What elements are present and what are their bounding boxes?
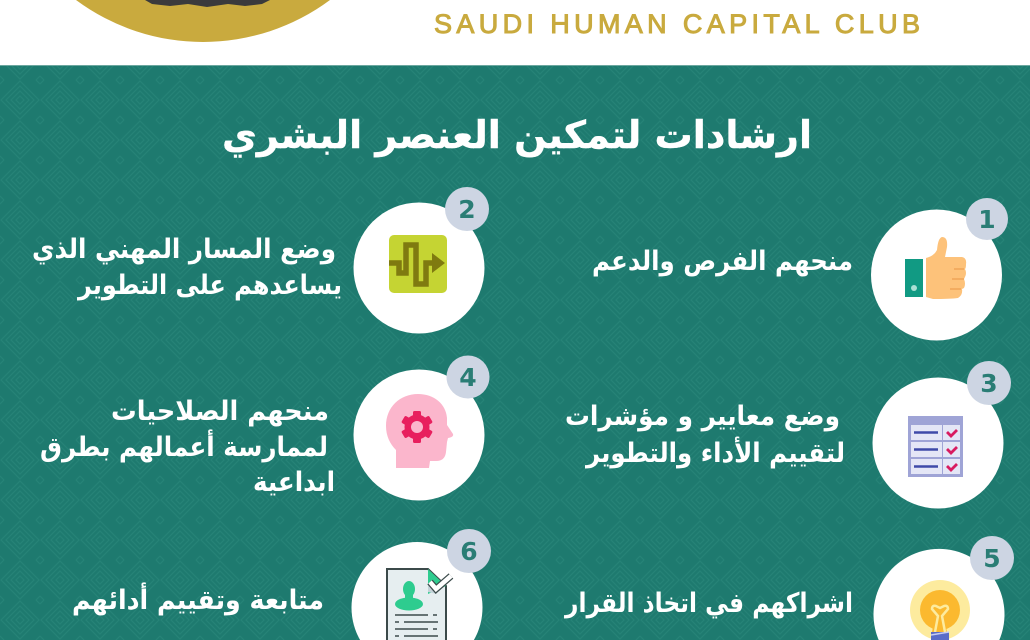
badge 2 <box>445 187 489 231</box>
item 2 text <box>32 234 342 301</box>
icon: path arrow <box>389 235 447 293</box>
item 4 text <box>40 396 335 498</box>
logo emblem <box>76 0 330 42</box>
icon: light bulb <box>910 580 970 640</box>
item 3 text: وضع معايير و مؤشرات <box>565 401 840 432</box>
badge 1 <box>966 198 1008 240</box>
item 2 circle <box>354 202 484 334</box>
item 5 circle <box>874 549 1004 640</box>
item 3 circle <box>872 378 1004 508</box>
item 4 text: لممارسة أعمالهم بطرق <box>40 429 328 463</box>
item 1 circle <box>871 210 1002 340</box>
item 4: authority to work creatively <box>40 356 490 500</box>
item 1: opportunities and support <box>592 198 1008 340</box>
item 3: standards and indicators <box>565 361 1011 508</box>
item 5 text: اشراكهم في اتخاذ القرار <box>563 588 853 619</box>
number 4: 4 <box>459 363 477 392</box>
club name: SAUDI HUMAN CAPITAL CLUB <box>434 9 920 39</box>
icon: checklist <box>908 416 963 477</box>
number 2: 2 <box>458 195 476 224</box>
item 5: involvement in decisions <box>563 536 1014 640</box>
item 4 circle <box>354 370 484 500</box>
item 4 text: منحهم الصلاحيات <box>111 396 329 427</box>
item 6 circle <box>352 542 482 640</box>
icon: thumbs up <box>905 237 966 299</box>
item 6 text: متابعة وتقييم أدائهم <box>72 582 324 616</box>
number 5: 5 <box>983 544 1001 573</box>
item 6: follow-up and evaluation <box>72 529 491 640</box>
badge 5 <box>970 536 1014 580</box>
item 2 text: يساعدهم على التطوير <box>76 270 342 301</box>
item 1 text: منحهم الفرص والدعم <box>592 246 853 277</box>
item 4 text: ابداعية <box>253 467 335 498</box>
badge 3 <box>967 361 1011 405</box>
number 6: 6 <box>460 537 478 566</box>
title: ارشادات لتمكين العنصر البشري <box>222 113 812 157</box>
number 3: 3 <box>980 369 998 398</box>
icon: head with gear <box>386 394 453 468</box>
item 3 text: لتقييم الأداء والتطوير <box>584 436 845 469</box>
badge 4 <box>446 356 490 398</box>
badge 6 <box>447 529 491 573</box>
item 2 text: وضع المسار المهني الذي <box>32 234 336 265</box>
item 2: career path <box>32 187 489 334</box>
number 1: 1 <box>978 205 996 234</box>
item 3 text <box>565 401 845 469</box>
icon: resume document with check <box>387 569 451 640</box>
